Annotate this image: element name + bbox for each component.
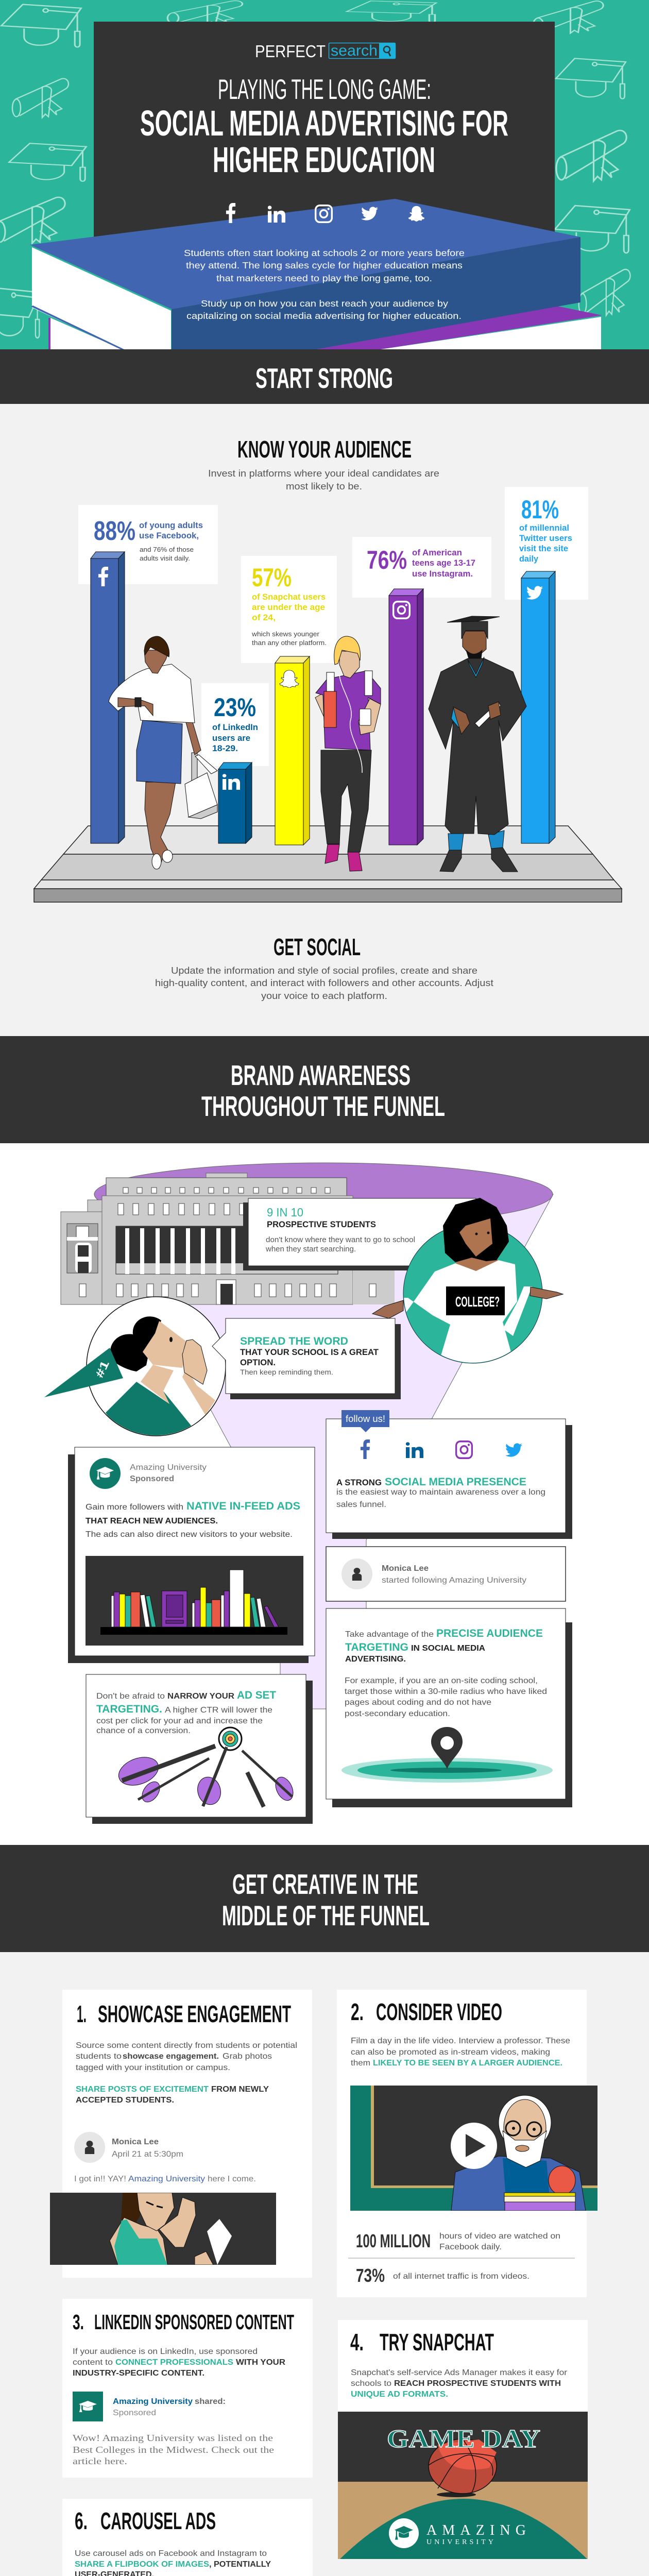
stat card: snapchat: 57%: [252, 563, 292, 592]
stat card: linkedin: 18-29.: [212, 743, 238, 753]
card 6: carousel ads: , POTENTIALLY: [209, 2560, 271, 2569]
card: native in-feed ads: Amazing University: [130, 1463, 207, 1472]
stat card: twitter: 81%: [521, 495, 559, 524]
card 1: showcase engagement: Grab photos: [223, 2052, 272, 2061]
card 4: try snapchat: UNIQUE AD FORMATS.: [351, 2390, 448, 2399]
logo: amazing university: UNIVERSITY: [426, 2538, 493, 2546]
card 2: consider video: can also be promoted as in-stream videos, making: [351, 2048, 550, 2057]
bar: instagram: [389, 589, 423, 845]
stat card: facebook: adults visit daily.: [140, 554, 190, 562]
bar: snapchat: [275, 656, 310, 845]
bar: linkedin: [218, 762, 252, 843]
card 3: linkedin sponsored content: content to: [73, 2358, 113, 2367]
icon: pennant: #1: [93, 1359, 112, 1380]
stat: 100 million: Facebook daily.: [439, 2243, 502, 2251]
stat card: facebook: [78, 505, 218, 584]
title: HIGHER EDUCATION: [213, 140, 435, 180]
card: narrow ad set targeting: TARGETING.: [96, 1703, 162, 1715]
campus building: [61, 1173, 395, 1304]
figure: graduate: [429, 616, 526, 872]
card: native in-feed ads: Gain more followers with: [86, 1503, 183, 1512]
card 4: try snapchat: schools to: [351, 2379, 391, 2388]
card: narrow ad set targeting: Don't be afraid to: [96, 1692, 165, 1701]
heading: get social: GET SOCIAL: [274, 934, 361, 960]
card 3: linkedin sponsored content: Wow! Amazing University was listed on the: [73, 2433, 273, 2443]
title: [141, 79, 508, 172]
post author: April 21 at 5:30pm: [112, 2150, 183, 2159]
card 3: linkedin sponsored content: article here.: [73, 2456, 127, 2466]
callout: spread the word: [212, 1318, 401, 1399]
intro text: Students often start looking at schools 2 or more years before: [184, 248, 465, 258]
card 1: showcase engagement: Source some content directly from students or potential: [76, 2041, 297, 2050]
get social text: your voice to each platform.: [261, 991, 387, 1001]
stat card: facebook: use Facebook,: [139, 531, 199, 540]
callout: 9 in 10: PROSPECTIVE STUDENTS: [267, 1219, 376, 1229]
stat: 100 million: hours of video are watched on: [439, 2232, 560, 2241]
card 6: carousel ads: Use carousel ads on Facebook and Instagram to: [75, 2549, 267, 2558]
stat card: snapchat: which skews younger: [251, 630, 320, 638]
callout: spread the word: THAT YOUR SCHOOL IS A GREAT: [240, 1348, 379, 1357]
figure: woman checking watch: [109, 636, 217, 869]
stat card: twitter: visit the site: [519, 544, 568, 553]
card 4: try snapchat: REACH PROSPECTIVE STUDENTS WITH: [394, 2379, 561, 2388]
stat card: instagram: teens age 13-17: [412, 558, 475, 568]
card 6: carousel ads: SHARE A FLIPBOOK OF IMAGES: [75, 2560, 209, 2569]
stat: 73 percent: of all internet traffic is from videos.: [393, 2272, 530, 2281]
post author: Monica Lee: [112, 2138, 159, 2146]
card 3: linkedin sponsored content: 3.: [73, 2310, 84, 2334]
section band: brand awareness: THROUGHOUT THE FUNNEL: [201, 1090, 445, 1122]
card: new follower: [326, 1547, 566, 1601]
card 3: linkedin sponsored content: LINKEDIN SPONSORED CONTENT: [94, 2310, 294, 2334]
intro text: Study up on how you can best reach your audience by: [201, 298, 448, 309]
stat card: instagram: 76%: [367, 546, 407, 574]
label: college: COLLEGE?: [455, 1294, 500, 1310]
card: narrow ad set targeting: cost per click for your ad and increase the: [96, 1717, 263, 1725]
stat card: facebook: of young adults: [139, 520, 203, 530]
card 1: showcase engagement: ACCEPTED STUDENTS.: [76, 2096, 174, 2105]
section band: get creative: [0, 1845, 649, 1952]
subheading: [208, 468, 439, 492]
card: precise audience targeting: Take advantage of the: [345, 1630, 434, 1639]
callout: 9 in 10: don't know where they want to go to school: [266, 1236, 415, 1244]
intro text: capitalizing on social media advertising for higher education.: [186, 311, 462, 321]
card 4: try snapchat: 4.: [350, 2329, 364, 2355]
icon: play button: [451, 2123, 497, 2169]
card: precise audience targeting: For example, if you are an on-site coding school,: [345, 1676, 538, 1685]
card 1: showcase engagement: [50, 1990, 312, 2278]
stat card: twitter: daily: [519, 554, 539, 564]
figure: student with books: [315, 636, 381, 871]
stat: 73 percent: 73%: [356, 2265, 385, 2286]
card 6: carousel ads: CAROUSEL ADS: [100, 2507, 216, 2534]
card 1: showcase engagement: here I come.: [208, 2175, 256, 2183]
callout: 9 in 10: [243, 1198, 476, 1270]
illustration: game day ad: GAME DAY: [387, 2424, 540, 2453]
get social text: high-quality content, and interact with followers and other accounts. Adjust: [155, 978, 493, 988]
card: precise audience targeting: PRECISE AUDIENCE: [436, 1628, 543, 1639]
card 6: carousel ads: [62, 2499, 313, 2576]
card 3: linkedin sponsored content: CONNECT PROFESSIONALS: [115, 2358, 233, 2367]
panel: middle of funnel tactics: [0, 1952, 649, 2576]
bar: twitter: [521, 571, 555, 843]
funnel shape: [94, 1163, 553, 1709]
icon: pennant: [44, 1348, 123, 1397]
card 3: linkedin sponsored content: WITH YOUR: [236, 2358, 285, 2367]
icon: map pin: [341, 1727, 553, 1783]
social icons: [226, 203, 424, 223]
logo: [256, 42, 396, 59]
card 1: showcase engagement: I got in!! YAY!: [74, 2175, 126, 2183]
subheading: Invest in platforms where your ideal candidates are: [208, 468, 439, 479]
card: precise audience targeting: ADVERTISING.: [345, 1655, 406, 1664]
card 1: showcase engagement: tagged with your institution or campus.: [76, 2063, 230, 2072]
card 2: consider video: Film a day in the life video. Interview a professor. These: [351, 2037, 570, 2045]
card: narrow ad set targeting: NARROW YOUR: [167, 1692, 234, 1701]
card 3: linkedin sponsored content: If your audience is on LinkedIn, use sponsored: [73, 2347, 258, 2356]
intro text: [184, 248, 465, 321]
card 4: try snapchat: [338, 2320, 588, 2559]
title panel background: [94, 22, 555, 253]
stat card: facebook: and 76% of those: [140, 546, 194, 553]
callout: 9 in 10: when they start searching.: [265, 1245, 356, 1253]
stat card: facebook: 88%: [94, 516, 135, 546]
stat card: twitter: Twitter users: [519, 533, 572, 543]
stat card: snapchat: of Snapchat users: [252, 592, 326, 602]
panel: brand awareness funnel: [44, 1162, 572, 1824]
card: narrow ad set targeting: A higher CTR will lower the: [165, 1706, 272, 1715]
card: native in-feed ads: The ads can also direct new visitors to your website.: [86, 1530, 293, 1539]
card 3: linkedin sponsored content: shared:: [195, 2397, 226, 2406]
card 2: consider video: 2.: [351, 1998, 364, 2025]
hero panel: [0, 0, 649, 349]
card 3: linkedin sponsored content: Amazing University: [113, 2397, 193, 2406]
card: social media presence: SOCIAL MEDIA PRESENCE: [385, 1476, 526, 1488]
card 3: linkedin sponsored content: [62, 2299, 313, 2478]
card 1: showcase engagement: showcase engagement.: [123, 2052, 219, 2061]
stat card: instagram: of American: [412, 548, 462, 557]
stat: 100 million: 100 MILLION: [356, 2230, 431, 2251]
stat card: linkedin: 23%: [214, 693, 256, 722]
stat card: snapchat: [241, 556, 337, 663]
intro text: that marketers need to play the long game, too.: [216, 273, 432, 283]
card 3: linkedin sponsored content: Sponsored: [113, 2409, 156, 2417]
section band: brand awareness: [0, 1036, 649, 1143]
card: new follower: Monica Lee: [382, 1564, 429, 1573]
get social text: [155, 965, 493, 1001]
section band: brand awareness: BRAND AWARENESS: [231, 1059, 411, 1091]
card 4: try snapchat: Snapchat's self-service Ads Manager makes it easy for: [351, 2368, 568, 2377]
logo: PERFECT: [255, 42, 326, 61]
card: native in-feed ads: NATIVE IN-FEED ADS: [186, 1500, 300, 1512]
card 3: linkedin sponsored content: INDUSTRY-SPECIFIC CONTENT.: [73, 2369, 204, 2378]
bar: facebook: [91, 552, 125, 843]
card: precise audience targeting: pages about coding and do not have: [345, 1698, 491, 1707]
stat card: instagram: [352, 537, 491, 598]
stat card: instagram: use Instagram.: [412, 569, 473, 579]
card: precise audience targeting: target those within a 30-mile radius who have liked: [345, 1687, 547, 1696]
intro text: they attend. The long sales cycle for higher education means: [186, 260, 463, 270]
logo: amazing university: AMAZING: [426, 2522, 526, 2538]
logo: amazing university: [389, 2518, 526, 2548]
card 1: showcase engagement: Amazing University: [128, 2175, 205, 2183]
card: precise audience targeting: [326, 1608, 572, 1807]
card 2: consider video: [337, 1990, 597, 2297]
card 1: showcase engagement: 1.: [77, 2001, 87, 2027]
post author: [74, 2132, 183, 2163]
card: social media presence: sales funnel.: [336, 1500, 386, 1509]
tag: follow us: follow us!: [346, 1414, 385, 1424]
heading: know your audience: KNOW YOUR AUDIENCE: [237, 436, 412, 463]
stat card: snapchat: are under the age: [252, 602, 325, 612]
illustration: accepted student: [50, 2193, 276, 2265]
card: narrow ad set targeting: [86, 1674, 313, 1824]
stat: 100 million: [356, 2230, 560, 2251]
card: social media presence: [326, 1410, 572, 1539]
card: social media presence: is the easiest way to maintain awareness over a long: [336, 1488, 545, 1497]
figure: shouting student with pennant: [44, 1297, 226, 1443]
callout: spread the word: Then keep reminding them.: [240, 1368, 333, 1376]
illustration: bookshelf: [86, 1556, 303, 1646]
callout: spread the word: SPREAD THE WORD: [240, 1335, 348, 1347]
illustration: game day ad: [338, 2412, 588, 2559]
panel: know your audience: [0, 404, 649, 1036]
section band: get creative: MIDDLE OF THE FUNNEL: [222, 1900, 430, 1931]
stat card: linkedin: of LinkedIn: [212, 722, 258, 732]
stat card: snapchat: of 24,: [252, 613, 276, 622]
callout: 9 in 10: 9 IN 10: [267, 1206, 303, 1219]
section band: get creative: GET CREATIVE IN THE: [232, 1868, 418, 1900]
card 6: carousel ads: 6.: [75, 2507, 88, 2534]
section band: start strong: START STRONG: [255, 362, 393, 394]
card 1: showcase engagement: SHOWCASE ENGAGEMENT: [98, 2001, 291, 2027]
logo: search: [331, 42, 378, 59]
card 4: try snapchat: TRY SNAPCHAT: [380, 2329, 494, 2355]
figure: confused student: [372, 1198, 563, 1370]
get social text: Update the information and style of social profiles, create and share: [171, 965, 477, 976]
card: native in-feed ads: Sponsored: [130, 1475, 174, 1483]
stat card: linkedin: users are: [212, 733, 250, 743]
tag: follow us: [341, 1410, 389, 1432]
card 1: showcase engagement: students to: [76, 2052, 122, 2061]
stat card: twitter: of millennial: [519, 523, 569, 533]
stat card: linkedin: [201, 683, 269, 766]
card 1: showcase engagement: FROM NEWLY: [211, 2085, 269, 2094]
books illustration: [30, 199, 602, 349]
card: narrow ad set targeting: chance of a conversion.: [96, 1726, 191, 1735]
card 3: linkedin sponsored content: Best Colleges in the Midwest. Check out the: [73, 2445, 274, 2455]
card: native in-feed ads: [68, 1447, 315, 1663]
card 2: consider video: CONSIDER VIDEO: [376, 1998, 502, 2025]
platform base: [34, 826, 622, 902]
stat card: snapchat: than any other platform.: [252, 639, 327, 647]
card: precise audience targeting: post-secondary education.: [345, 1709, 450, 1718]
callout: spread the word: OPTION.: [240, 1358, 276, 1367]
card 2: consider video: them: [351, 2059, 370, 2067]
card 2: consider video: LIKELY TO BE SEEN BY A LARGER AUDIENCE.: [373, 2059, 562, 2067]
card 1: showcase engagement: SHARE POSTS OF EXCITEMENT: [76, 2085, 209, 2094]
stat card: twitter: [505, 487, 588, 600]
card: narrow ad set targeting: AD SET: [237, 1689, 276, 1701]
title: PLAYING THE LONG GAME:: [218, 73, 431, 105]
subheading: most likely to be.: [286, 481, 362, 492]
sponsor logo: [73, 2392, 103, 2421]
card: new follower: started following Amazing University: [382, 1576, 526, 1585]
card: social media presence: A STRONG: [336, 1478, 382, 1487]
card: precise audience targeting: TARGETING: [345, 1641, 408, 1653]
card: precise audience targeting: IN SOCIAL MEDIA: [411, 1644, 485, 1653]
card: native in-feed ads: THAT REACH NEW AUDIENCES.: [86, 1517, 218, 1526]
social icons row: [361, 1439, 522, 1459]
illustration: professor video: [350, 2086, 597, 2211]
section band: start strong: [0, 349, 649, 404]
illustration: target and arrows: [115, 1727, 297, 1807]
stat: 73 percent: [356, 2265, 530, 2286]
